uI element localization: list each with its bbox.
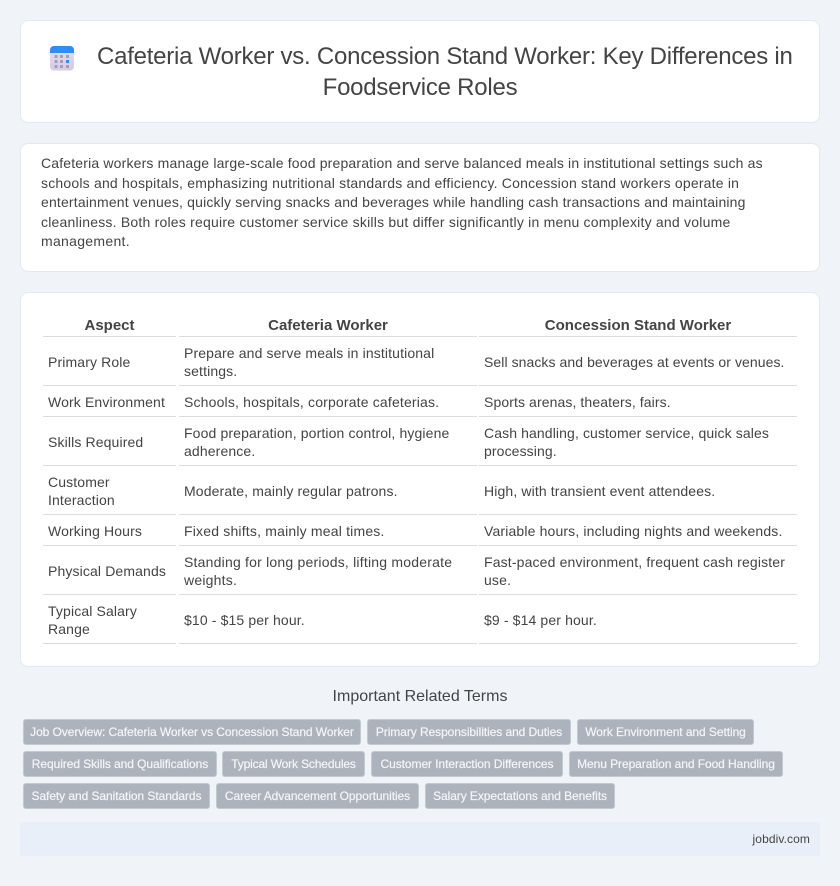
- row: skills required: Skills Required: [48, 434, 143, 450]
- panel: introduction: [20, 143, 820, 272]
- row: skills required: adherence.: [184, 443, 255, 459]
- row: physical demands: Standing for long periods, lifting moderate: [184, 554, 452, 570]
- tags: related terms: Job Overview: Cafeteria Worker vs Concession Stand Worker: [30, 725, 354, 739]
- text block: introduction: schools and hospitals, emphasizing nutritional standards and efficiency. Concession stand workers operate in: [41, 174, 739, 190]
- icon: calendar: [50, 46, 74, 70]
- tags: related terms: [23, 719, 783, 809]
- row: physical demands: Fast-paced environment, frequent cash register: [484, 554, 785, 570]
- table header: Cafeteria Worker: [268, 317, 388, 334]
- tags: related terms: Primary Responsibilities and Duties: [376, 725, 562, 739]
- row: customer interaction: High, with transient event attendees.: [484, 483, 715, 499]
- title: Cafeteria Worker vs. Concession Stand Worker: Key Differences in: [97, 43, 793, 70]
- row: typical salary range: $10 - $15 per hour.: [184, 612, 305, 628]
- table header: Aspect: [84, 317, 135, 334]
- row: primary role: settings.: [184, 363, 237, 379]
- row: skills required: [48, 425, 769, 459]
- row: typical salary range: [48, 603, 597, 637]
- row: work environment: Sports arenas, theaters, fairs.: [484, 394, 671, 410]
- row: physical demands: Physical Demands: [48, 563, 166, 579]
- footer: site name: jobdiv.com: [753, 832, 810, 846]
- row: work environment: Work Environment: [48, 394, 165, 410]
- text block: introduction: management.: [41, 233, 130, 249]
- row: skills required: Food preparation, portion control, hygiene: [184, 425, 449, 441]
- row: working hours: Fixed shifts, mainly meal times.: [184, 523, 385, 539]
- text block: introduction: entertainment venues, quickly serving snacks and beverages while handling cash transactions and maintaining: [41, 194, 746, 210]
- row: typical salary range: Typical Salary: [48, 603, 137, 619]
- row: skills required: processing.: [484, 443, 557, 459]
- row: physical demands: use.: [484, 572, 511, 588]
- row: customer interaction: Interaction: [48, 492, 115, 508]
- row: working hours: Variable hours, including nights and weekends.: [484, 523, 782, 539]
- table header: Concession Stand Worker: [545, 317, 731, 334]
- row: work environment: [48, 394, 671, 410]
- row: working hours: Working Hours: [48, 523, 142, 539]
- row: customer interaction: Moderate, mainly regular patrons.: [184, 483, 398, 499]
- tags: related terms: Salary Expectations and Benefits: [433, 789, 607, 803]
- row: customer interaction: [48, 474, 715, 508]
- text block: introduction: [41, 155, 763, 249]
- title: Foodservice Roles: [323, 74, 517, 101]
- row: typical salary range: $9 - $14 per hour.: [484, 612, 597, 628]
- table header: [84, 317, 731, 334]
- row: primary role: Primary Role: [48, 354, 130, 370]
- row: customer interaction: Customer: [48, 474, 110, 490]
- tags: related terms: Work Environment and Setting: [585, 725, 746, 739]
- tags: related terms: Menu Preparation and Food Handling: [577, 757, 775, 771]
- row: working hours: [48, 523, 782, 539]
- tags: related terms: Customer Interaction Differences: [381, 757, 553, 771]
- row: typical salary range: Range: [48, 621, 90, 637]
- row: physical demands: [48, 554, 785, 588]
- panel: header: [20, 20, 820, 123]
- text block: introduction: Cafeteria workers manage large-scale food preparation and serve balanced meals in institutional settings such as: [41, 155, 763, 171]
- footer: [20, 822, 820, 856]
- panel: comparison table: [20, 292, 820, 667]
- row: primary role: Prepare and serve meals in institutional: [184, 345, 434, 361]
- heading: important related terms: Important Related Terms: [333, 688, 507, 705]
- row: skills required: Cash handling, customer service, quick sales: [484, 425, 769, 441]
- row: physical demands: weights.: [184, 572, 237, 588]
- tags: related terms: Career Advancement Opportunities: [225, 789, 410, 803]
- text block: introduction: cleanliness. Both roles require customer service skills but differ significantly in menu complexity and volume: [41, 214, 730, 230]
- tags: related terms: Typical Work Schedules: [231, 757, 356, 771]
- row: primary role: [48, 345, 785, 379]
- row: work environment: Schools, hospitals, corporate cafeterias.: [184, 394, 439, 410]
- tags: related terms: Required Skills and Qualifications: [32, 757, 208, 771]
- title: [97, 43, 793, 101]
- tags: related terms: Safety and Sanitation Standards: [32, 789, 201, 803]
- row: primary role: Sell snacks and beverages at events or venues.: [484, 354, 785, 370]
